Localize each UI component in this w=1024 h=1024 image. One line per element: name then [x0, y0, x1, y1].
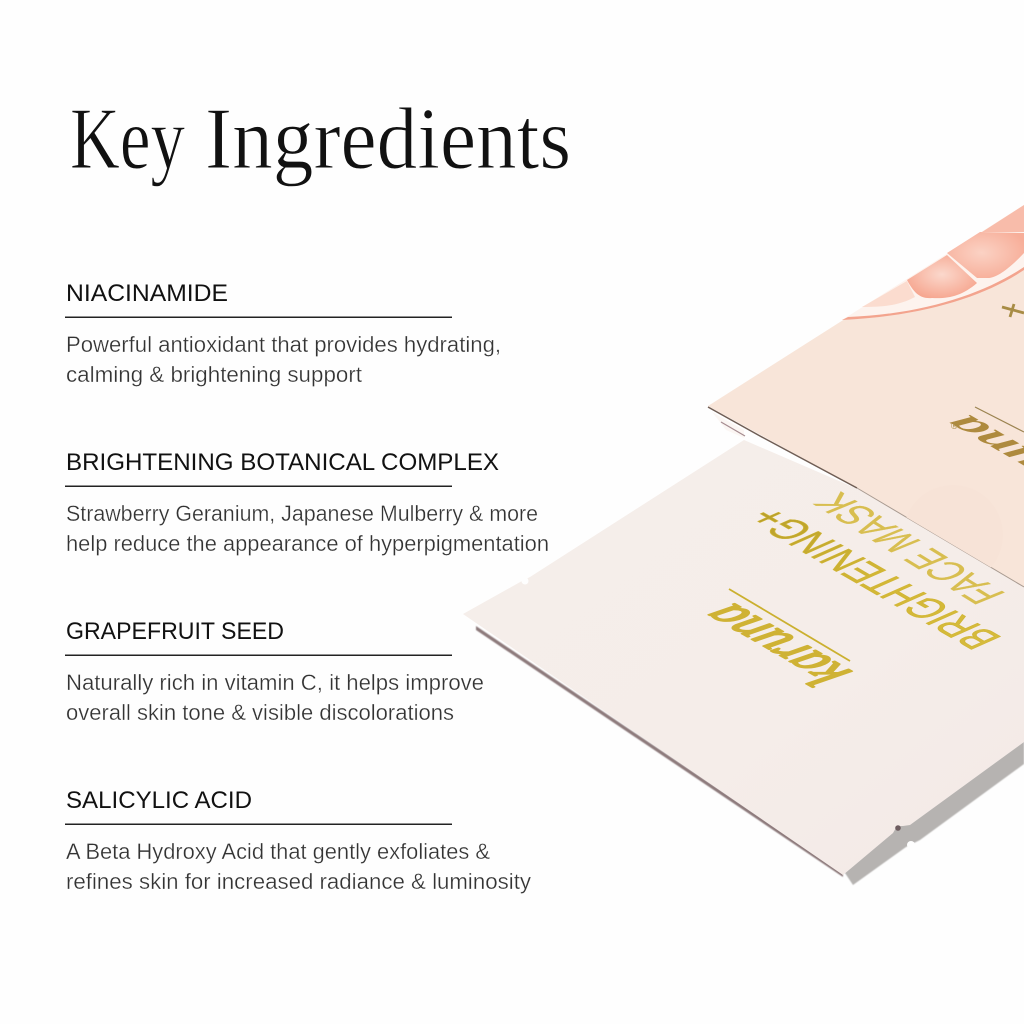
box logo: ® [951, 421, 958, 431]
sachet logo: karuna [685, 596, 865, 695]
ingredient: niacinamide: calming & brightening support [66, 362, 362, 387]
ingredient: niacinamide: Powerful antioxidant that provides hydrating, [66, 332, 501, 357]
title: Ingredients [205, 91, 571, 188]
sachet text: brightening: BRIGHTENING+ [736, 502, 1012, 655]
infographic canvas [65, 108, 1024, 894]
box seal circle [906, 516, 992, 568]
ingredient: brightening botanical complex: BRIGHTENING BOTANICAL COMPLEX [66, 449, 499, 476]
ingredient: salicylic acid: SALICYLIC ACID [66, 787, 252, 814]
ingredient: grapefruit seed [65, 618, 484, 725]
ingredient: grapefruit seed: Naturally rich in vitamin C, it helps improve [66, 670, 484, 695]
ingredient: niacinamide: NIACINAMIDE [66, 280, 228, 307]
sachet body [463, 440, 1024, 875]
outer box [708, 205, 1024, 587]
sachet tear notches [522, 578, 915, 849]
ingredient: salicylic acid: A Beta Hydroxy Acid that gently exfoliates & [66, 839, 490, 864]
ingredient: brightening botanical complex: Strawberry Geranium, Japanese Mulberry & more [66, 501, 538, 526]
box logo [930, 407, 1024, 477]
ingredient: brightening botanical complex: help reduce the appearance of hyperpigmentation [66, 531, 549, 556]
sachet shadow [476, 626, 1024, 885]
box plus sign [1002, 304, 1024, 317]
grapefruit slice [842, 205, 1024, 320]
ingredient: brightening botanical complex [65, 449, 549, 556]
product: mask sachet and outer box [463, 205, 1024, 885]
ingredient: salicylic acid: refines skin for increased radiance & luminosity [66, 869, 531, 894]
sachet text: face mask: FACE MASK [803, 487, 1016, 610]
title: Key [70, 91, 185, 188]
ingredient: grapefruit seed: GRAPEFRUIT SEED [66, 618, 284, 645]
ingredient: grapefruit seed: overall skin tone & visible discolorations [66, 700, 454, 725]
title [70, 91, 571, 188]
ingredient: niacinamide [65, 280, 501, 387]
ingredient: salicylic acid [65, 787, 531, 894]
